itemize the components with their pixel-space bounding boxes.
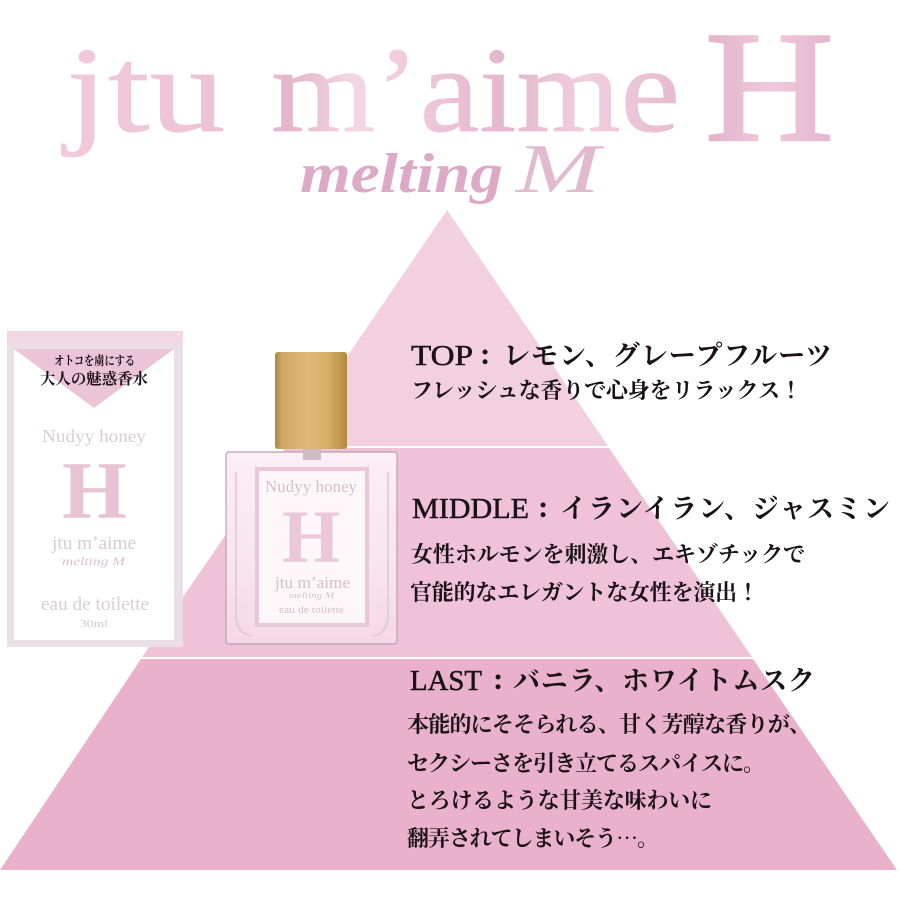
text block: last notes: とろけるような甘美な味わいに <box>407 788 712 813</box>
box ribbon <box>14 349 174 408</box>
bottle label text <box>265 477 357 616</box>
bottle label text: melting M <box>289 590 335 600</box>
text block: last notes: バニラ、ホワイトムスク <box>513 666 815 696</box>
title: jtu m'aime H: jtu <box>61 23 225 158</box>
text block: last notes: 本能的にそそられる、甘く芳醇な香りが、 <box>407 712 811 737</box>
text block: top notes: : <box>480 336 490 371</box>
text block: last notes: 翻弄されてしまいそう…。 <box>407 822 659 853</box>
perfume bottle <box>226 352 397 644</box>
text block: last notes: セクシーさを引き立てるスパイスに。 <box>407 751 765 776</box>
box label text: melting M <box>62 554 126 568</box>
box tagline: 大人の魅惑香水 <box>40 369 148 388</box>
text block: middle notes: イランイラン、ジャスミン <box>560 494 890 524</box>
bottle glass <box>226 452 397 644</box>
subtitle: melting M <box>300 131 605 208</box>
box label text: Nudyy honey <box>42 426 146 446</box>
bottle label text: jtu m’aime <box>274 573 350 592</box>
bottle cap <box>275 352 347 449</box>
bottle label <box>257 469 367 625</box>
box label text: H <box>62 445 127 536</box>
box tagline <box>40 353 148 388</box>
box tagline: オトコを虜にする <box>54 353 135 368</box>
text block: top notes: レモン、グレープフルーツ <box>503 341 832 371</box>
title: jtu m'aime H: m’aime <box>271 23 680 158</box>
bottle label text: H <box>282 496 340 579</box>
bottle label text: Nudyy honey <box>265 477 357 496</box>
box label text: jtu m’aime <box>51 533 136 554</box>
text block: middle notes <box>410 489 890 605</box>
text block: middle notes: MIDDLE <box>412 493 529 525</box>
text block: middle notes: 官能的なエレガントな女性を演出！ <box>410 580 759 605</box>
text block: middle notes: : <box>538 489 548 524</box>
pyramid bottom tier <box>0 659 897 870</box>
text block: top notes <box>411 336 832 403</box>
box label text: eau de toilette <box>41 594 149 615</box>
pyramid chart <box>0 210 897 870</box>
title: jtu m'aime H: H <box>705 0 834 175</box>
pyramid top tier <box>286 210 608 446</box>
text block: last notes <box>407 661 815 853</box>
subtitle: melting M: M <box>515 131 605 208</box>
text block: last notes: LAST <box>410 665 482 697</box>
title: jtu m'aime H <box>61 0 834 175</box>
text block: top notes: TOP <box>411 340 473 372</box>
text block: last notes: : <box>493 661 503 696</box>
product box <box>7 331 183 647</box>
text block: middle notes: 女性ホルモンを刺激し、エキゾチックで <box>411 542 805 567</box>
text block: top notes: フレッシュな香りで心身をリラックス！ <box>411 378 802 403</box>
box label text: 30ml <box>80 619 108 630</box>
subtitle: melting M: melting <box>300 143 503 205</box>
pyramid middle tier <box>142 448 752 657</box>
bottle label text: eau de toilette <box>279 605 345 616</box>
box label text <box>41 426 149 630</box>
